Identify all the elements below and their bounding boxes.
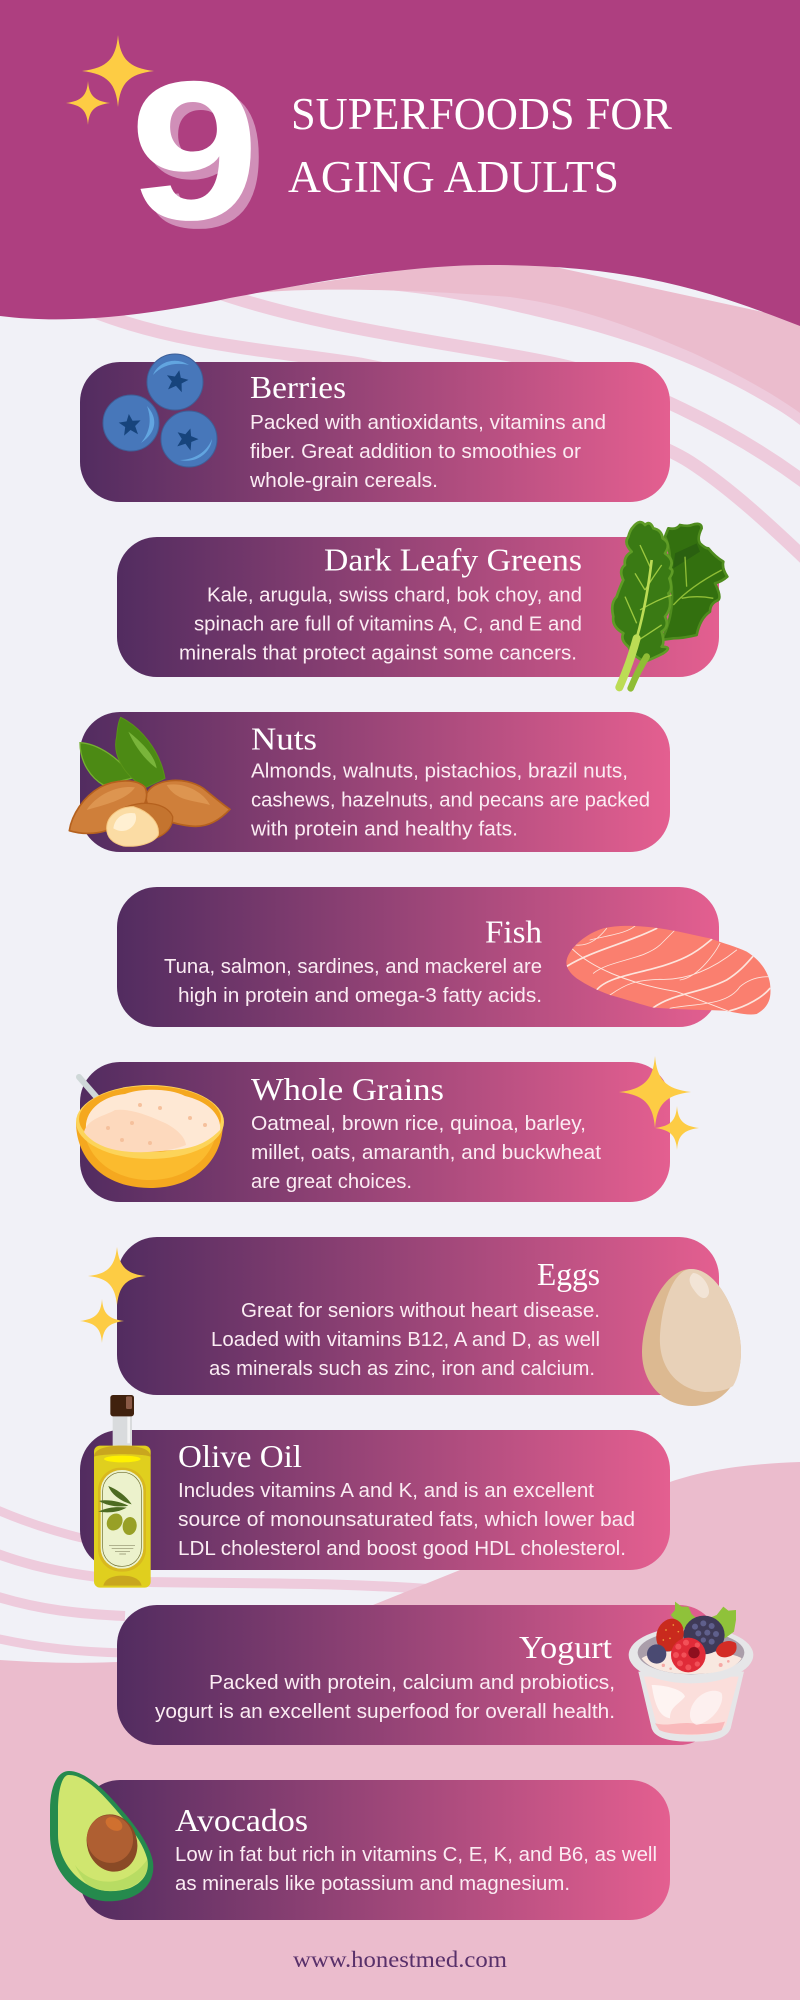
body text: [251, 1113, 601, 1193]
body text: Almonds, walnuts, pistachios, brazil nuts,: [251, 760, 628, 782]
body text: Loaded with vitamins B12, A and D, as well: [211, 1329, 600, 1351]
icon: yogurt cup with berries: [629, 1602, 753, 1742]
title text: AGING ADULTS: [288, 152, 619, 202]
card background: [80, 362, 670, 502]
heading: Fish: [485, 914, 542, 950]
heading: Berries: [250, 369, 346, 405]
card background: [117, 887, 719, 1027]
icon: olive oil bottle: [94, 1395, 151, 1588]
heading: Olive Oil: [178, 1438, 302, 1474]
panel: eggs: [80, 1237, 741, 1406]
body text: Oatmeal, brown rice, quinoa, barley,: [251, 1113, 586, 1135]
body text: Packed with antioxidants, vitamins and: [250, 412, 606, 434]
icon: oatmeal bowl: [76, 1077, 224, 1188]
panel: nuts: [69, 712, 670, 852]
number nine: 9: [138, 48, 267, 269]
icon: egg: [642, 1269, 741, 1406]
body text: [178, 1480, 635, 1560]
icon: salmon fillet: [566, 926, 771, 1015]
icon: sparkles: [619, 1056, 699, 1150]
panel: dark leafy greens: [117, 522, 727, 688]
footer website: www.honestmed.com: [293, 1947, 507, 1972]
icon: sparkles: [80, 1247, 146, 1343]
heading: Eggs: [537, 1256, 600, 1292]
body text: source of monounsaturated fats, which lower bad: [178, 1509, 635, 1531]
body text: [164, 956, 542, 1007]
pink wave band: [230, 255, 800, 413]
background stripes top: [95, 288, 800, 568]
body text: yogurt is an excellent superfood for overall health.: [155, 1701, 615, 1723]
body text: Great for seniors without heart disease.: [241, 1300, 600, 1322]
title text: [288, 89, 672, 202]
body text: cashews, hazelnuts, and pecans are packed: [251, 790, 650, 812]
icon: kale leaves: [612, 522, 727, 688]
panel: berries: [80, 354, 670, 502]
card background: [80, 1780, 670, 1920]
body text: [249, 412, 606, 492]
body text: spinach are full of vitamins A, C, and E and: [194, 614, 582, 636]
body text: with protein and healthy fats.: [250, 818, 518, 840]
number nine: 9: [130, 40, 259, 261]
card background: [117, 1605, 719, 1745]
panel: yogurt: [117, 1602, 753, 1745]
body text: [209, 1300, 600, 1380]
body text: Includes vitamins A and K, and is an excellent: [178, 1480, 594, 1502]
background pink wave bottom: [0, 1462, 800, 2000]
body text: LDL cholesterol and boost good HDL cholesterol.: [178, 1538, 626, 1560]
card background: [117, 1237, 719, 1395]
card background: [80, 712, 670, 852]
body text: are great choices.: [251, 1171, 412, 1193]
body text: Packed with protein, calcium and probiotics,: [209, 1672, 615, 1694]
body text: whole-grain cereals.: [249, 470, 438, 492]
body text: [179, 584, 582, 664]
panel: avocados: [50, 1771, 670, 1920]
header wave: [0, 0, 800, 326]
card background: [80, 1062, 670, 1202]
panel: whole grains: [76, 1056, 699, 1202]
heading: Whole Grains: [251, 1071, 444, 1107]
body text: Kale, arugula, swiss chard, bok choy, and: [207, 584, 582, 606]
heading: Avocados: [175, 1802, 308, 1838]
body text: Low in fat but rich in vitamins C, E, K, and B6, as well: [175, 1844, 657, 1866]
icon: avocado half: [50, 1771, 153, 1901]
card background: [80, 1430, 670, 1570]
title text: SUPERFOODS FOR: [291, 89, 672, 139]
heading: Nuts: [251, 720, 317, 756]
panel: olive oil: [80, 1395, 670, 1588]
title block: [130, 40, 672, 269]
body text: [250, 760, 650, 840]
body text: fiber. Great addition to smoothies or: [250, 441, 581, 463]
body text: as minerals like potassium and magnesium.: [175, 1873, 570, 1895]
icon: title sparkles: [66, 35, 154, 125]
body text: high in protein and omega-3 fatty acids.: [178, 985, 542, 1007]
panel: fish: [117, 887, 771, 1027]
icon: blueberries: [103, 354, 217, 467]
body text: as minerals such as zinc, iron and calcium.: [209, 1358, 595, 1380]
body text: millet, oats, amaranth, and buckwheat: [251, 1142, 601, 1164]
body text: Tuna, salmon, sardines, and mackerel are: [164, 956, 542, 978]
body text: [155, 1672, 615, 1723]
background stripes bottom: [0, 1509, 440, 1653]
card background: [117, 537, 719, 677]
body text: minerals that protect against some cancers.: [179, 642, 577, 664]
heading: Dark Leafy Greens: [324, 542, 582, 578]
body text: [175, 1844, 657, 1895]
icon: almonds and leaves: [69, 717, 230, 846]
pale pink wave: [260, 286, 800, 425]
heading: Yogurt: [519, 1629, 612, 1665]
